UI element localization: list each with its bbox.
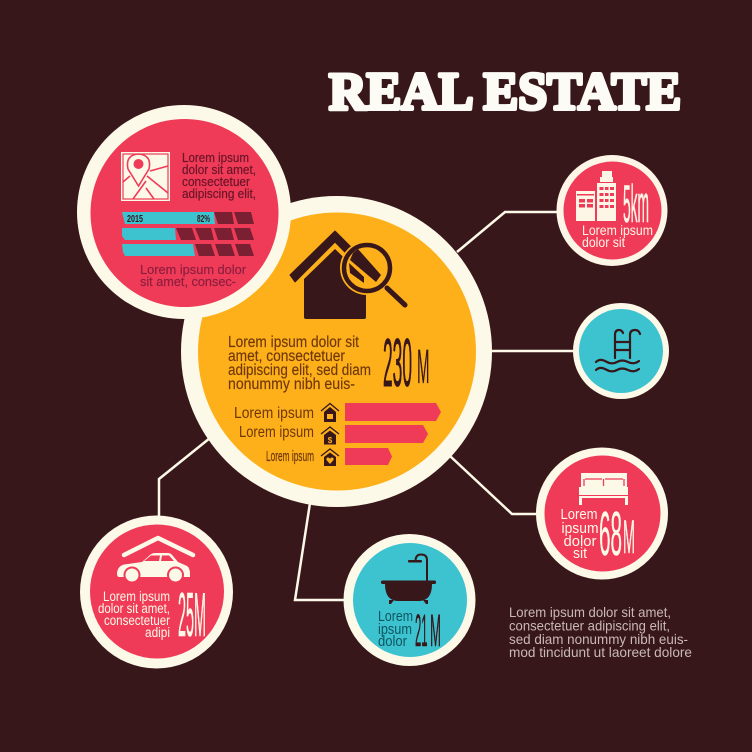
text block: main description (228, 334, 371, 393)
progress bars: 2015 (127, 213, 143, 225)
text block: buildings: dolor sit (582, 235, 625, 250)
text block: bathroom: ipsum (378, 622, 412, 638)
panel: main yellow circle: M (417, 341, 430, 394)
text block: bathroom: Lorem (378, 609, 413, 625)
text block: map footer: sit amet, consec- (140, 274, 236, 289)
text block: map description: Lorem ipsum (182, 151, 249, 165)
panel: main yellow circle (181, 196, 492, 507)
icon: pool ladder (596, 330, 640, 371)
panel: buildings 5km (556, 155, 668, 266)
text block: main description: adipiscing elit, sed diam (228, 362, 371, 379)
number: 68 M: 68 (599, 500, 622, 569)
panel: main yellow circle: 230 (383, 325, 412, 401)
panel: bedroom (536, 448, 668, 580)
number: 21 M: 21 (415, 605, 428, 656)
text block: bedroom: sit (573, 546, 587, 562)
icon: map pin (121, 152, 170, 201)
text block: garage: consectetuer (104, 613, 170, 628)
text block: bathroom: dolor (378, 634, 407, 650)
number: 21 M (415, 605, 441, 656)
text block: garage: adipi (145, 625, 170, 640)
panel: garage (80, 516, 233, 668)
icon: car under roof (117, 538, 193, 584)
text block: bedroom: ipsum (562, 521, 598, 537)
panel: map and progress circle (77, 105, 291, 319)
text block: map footer (140, 262, 247, 289)
text block: buildings (582, 223, 653, 250)
progress bars (122, 212, 254, 256)
row 1: label, icon and bar: Lorem ipsum (234, 405, 314, 422)
progress bars: 82% (197, 213, 210, 225)
panel: bathroom (344, 534, 476, 666)
text block: buildings: Lorem ipsum (582, 223, 653, 238)
row 3: label, icon and bar (266, 448, 392, 466)
number: 68 M (599, 500, 635, 569)
icon: buildings (576, 171, 616, 221)
number: 230 M (383, 325, 430, 401)
title: REAL ESTATE (329, 63, 681, 121)
panel: bathroom: M (430, 605, 441, 656)
row 2: label, icon and bar: $ (328, 436, 333, 445)
text block: map footer: Lorem ipsum dolor (140, 262, 247, 277)
text block: bathroom (378, 609, 413, 650)
text block: footer note: consectetuer adipiscing elit, (509, 618, 670, 634)
text block: map description: dolor sit amet, (182, 163, 256, 177)
text block: footer note: mod tincidunt ut laoreet dolore (509, 644, 692, 660)
row 2: label, icon and bar (239, 424, 428, 445)
text block: bedroom: dolor (564, 534, 597, 550)
connector lines (159, 212, 575, 600)
row 2: label, icon and bar: Lorem ipsum (239, 424, 314, 441)
icon: bed (579, 473, 628, 505)
text block: main description: Lorem ipsum dolor sit (228, 334, 360, 351)
text block: map description: adipiscing elit, (182, 187, 256, 201)
row 3: label, icon and bar: Lorem ipsum (266, 449, 314, 465)
text block: footer note (509, 604, 692, 660)
text block: main description: amet, consectetuer (228, 348, 345, 365)
text block: map description (182, 151, 256, 201)
text block: main description: nonummy nibh euis- (228, 376, 355, 393)
panel: bedroom: M (623, 510, 635, 563)
text block: bedroom (560, 507, 598, 562)
row 1: label, icon and bar (234, 403, 441, 422)
text block: footer note: sed diam nonummy nibh euis- (509, 631, 688, 647)
text block: garage: dolor sit amet, (98, 601, 170, 616)
panel: swimming pool (573, 303, 669, 399)
text block: garage (98, 589, 170, 640)
text block: footer note: Lorem ipsum dolor sit amet, (509, 604, 671, 620)
text block: bedroom: Lorem (560, 507, 598, 523)
infographic canvas: 25M (178, 581, 206, 650)
text block: garage: Lorem ipsum (103, 589, 170, 604)
infographic canvas: 5km (623, 175, 649, 234)
text block: map description: consectetuer (182, 175, 250, 189)
icon: house with magnifier (290, 231, 405, 319)
icon: bathtub (381, 554, 436, 604)
